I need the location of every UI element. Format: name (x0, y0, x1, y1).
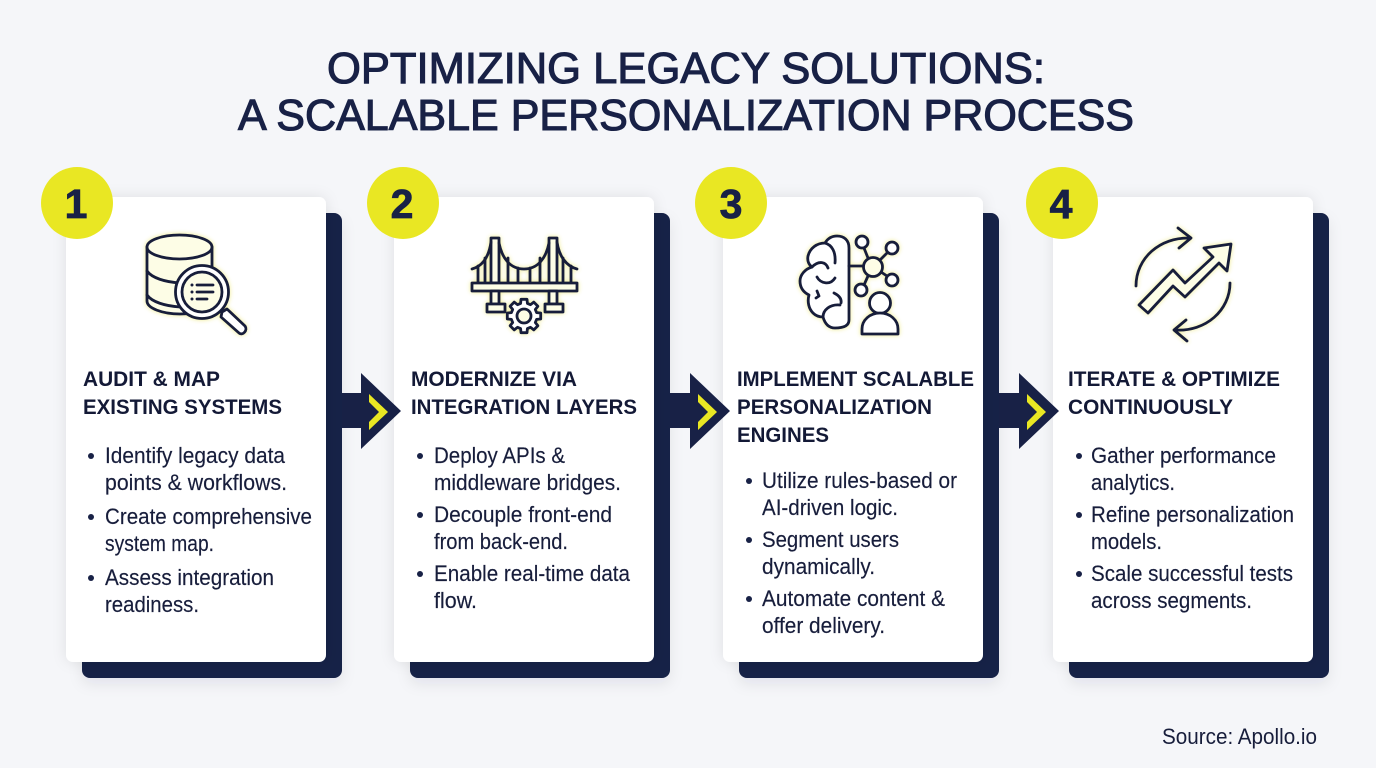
text: step 1 bullets: system map. (105, 531, 214, 556)
arrow: step 2 to 3 (670, 373, 730, 449)
text: step 3 bullets (746, 468, 957, 638)
heading: step 2 (411, 367, 637, 419)
icon: bridge with gear (472, 238, 577, 333)
badge: number 4 (1026, 167, 1098, 239)
heading: step 1 (83, 367, 282, 419)
text: step 4 bullets: across segments. (1091, 588, 1252, 613)
text: step 3 bullets: AI-driven logic. (762, 495, 898, 520)
icon: brain network and person (800, 236, 898, 334)
text: step 4 bullets (1076, 443, 1294, 613)
text: step 4 bullets: models. (1091, 529, 1162, 554)
text: step 1 bullets: readiness. (105, 592, 199, 617)
panel: step 4 iterate (1053, 197, 1329, 678)
badge: number 1 (41, 167, 113, 239)
icon: cycle arrows with rising arrow (1136, 228, 1231, 341)
source note: Source: Apollo.io (1162, 724, 1317, 749)
heading: step 1: AUDIT & MAP (83, 367, 220, 391)
text: step 3 bullets: Segment users (762, 527, 899, 552)
title: OPTIMIZING LEGACY SOLUTIONS: (327, 45, 1045, 93)
text: step 2 bullets: flow. (434, 588, 477, 613)
text: step 2 bullets: Enable real-time data (434, 561, 630, 586)
text: step 4 bullets: Refine personalization (1091, 502, 1294, 527)
text: step 3 bullets: dynamically. (762, 554, 875, 579)
panel: step 2 modernize (394, 197, 670, 678)
heading: step 2: INTEGRATION LAYERS (411, 395, 637, 419)
text: step 1 bullets: Identify legacy data (105, 443, 285, 468)
arrow: step 1 to 2 (342, 373, 401, 449)
heading: step 2: MODERNIZE VIA (411, 367, 577, 391)
badge: number 4: 4 (1050, 181, 1073, 227)
text: step 2 bullets: middleware bridges. (434, 470, 621, 495)
badge: number 2 (367, 167, 439, 239)
text: step 3 bullets: offer delivery. (762, 613, 885, 638)
text: step 1 bullets: Assess integration (105, 565, 274, 590)
heading: step 3 (737, 367, 974, 447)
badge: number 3 (695, 167, 767, 239)
text: step 4 bullets: Scale successful tests (1091, 561, 1293, 586)
text: step 2 bullets: Deploy APIs & (434, 443, 565, 468)
text: step 4 bullets: Gather performance (1091, 443, 1276, 468)
title (238, 45, 1134, 140)
panel: step 1 audit and map (66, 197, 342, 678)
heading: step 4 (1068, 367, 1280, 419)
badge: number 1: 1 (65, 181, 87, 227)
text: step 2 bullets: Decouple front-end (434, 502, 612, 527)
panel: step 3 implement (723, 197, 999, 678)
text: step 2 bullets (417, 443, 630, 613)
heading: step 4: ITERATE & OPTIMIZE (1068, 367, 1280, 391)
heading: step 3: IMPLEMENT SCALABLE (737, 367, 974, 391)
title: A SCALABLE PERSONALIZATION PROCESS (238, 92, 1134, 140)
heading: step 4: CONTINUOUSLY (1068, 395, 1233, 419)
heading: step 3: PERSONALIZATION (737, 395, 932, 419)
text: step 4 bullets: analytics. (1091, 470, 1175, 495)
icon: database with magnifier (147, 235, 246, 334)
heading: step 3: ENGINES (737, 423, 829, 447)
heading: step 1: EXISTING SYSTEMS (83, 395, 282, 419)
arrow: step 3 to 4 (999, 373, 1059, 449)
text: step 3 bullets: Utilize rules-based or (762, 468, 957, 493)
badge: number 3: 3 (720, 181, 742, 227)
text: step 1 bullets: Create comprehensive (105, 504, 312, 529)
badge: number 2: 2 (391, 181, 413, 227)
text: step 3 bullets: Automate content & (762, 586, 945, 611)
text: step 2 bullets: from back-end. (434, 529, 568, 554)
text: step 1 bullets: points & workflows. (105, 470, 287, 495)
text: step 1 bullets (88, 443, 312, 617)
